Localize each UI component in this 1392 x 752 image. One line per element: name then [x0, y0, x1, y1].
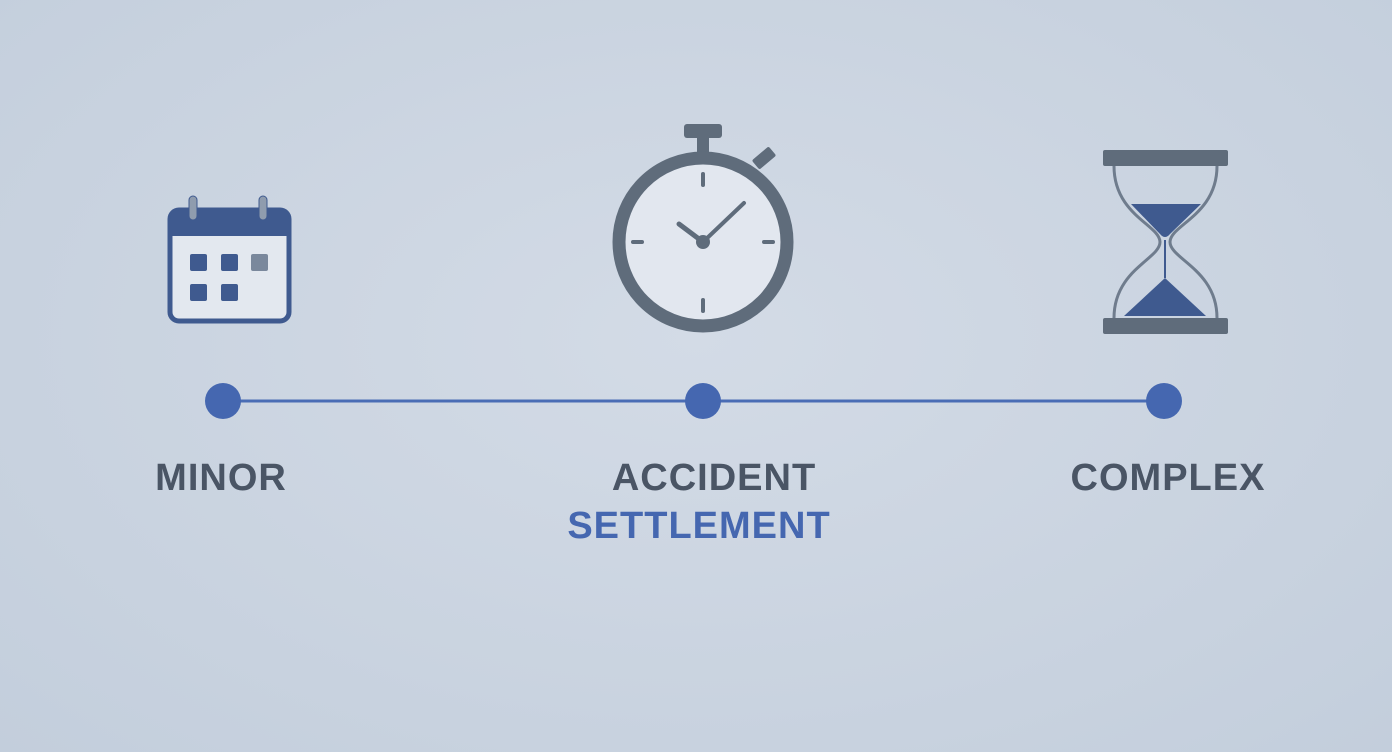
icon: hourglass: [1103, 150, 1228, 334]
label: settlement: SETTLEMENT: [567, 505, 831, 547]
icon: calendar: [170, 196, 289, 321]
label: accident: ACCIDENT: [612, 457, 816, 499]
label: complex: COMPLEX: [1071, 457, 1265, 499]
timeline: [205, 383, 1182, 419]
label: minor: MINOR: [155, 457, 287, 499]
icon: stopwatch: [619, 124, 787, 326]
